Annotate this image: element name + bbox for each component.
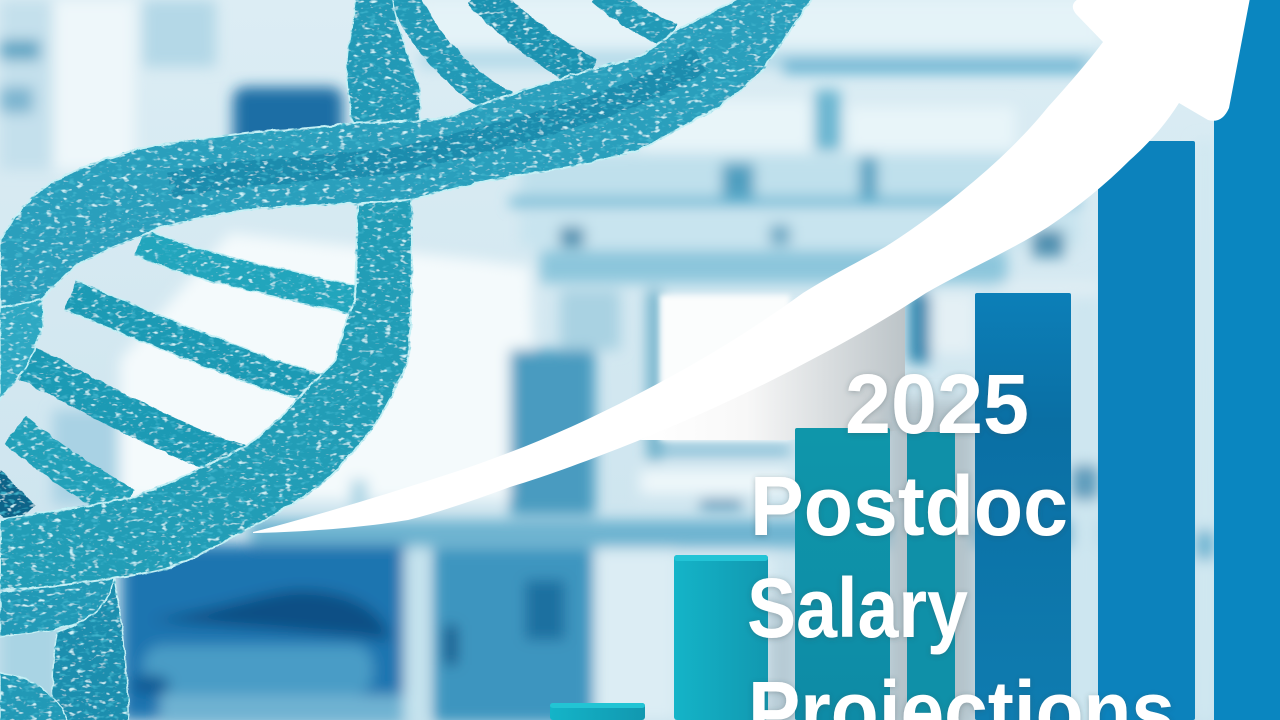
lower-left strands <box>0 575 129 720</box>
title line 1: 2025 <box>845 357 1029 451</box>
dark inner strand <box>0 470 35 525</box>
growth arrow <box>253 0 1250 533</box>
bar chart: rising salaries <box>550 0 1280 720</box>
bar 3 <box>795 428 890 720</box>
bar 4 <box>975 293 1071 720</box>
title line 3: Salary <box>747 561 968 655</box>
bar 6 <box>1214 0 1280 720</box>
title <box>747 357 1175 720</box>
bar 3 narrow rear column <box>907 432 955 720</box>
bar 2 <box>674 555 768 720</box>
front strand shading <box>170 60 700 185</box>
main front strand <box>0 0 815 307</box>
left lobe of strand <box>0 295 43 400</box>
main back strand <box>0 190 412 590</box>
title line 2: Postdoc <box>750 459 1068 553</box>
bar 5 <box>1098 141 1195 720</box>
bar 1 <box>550 703 645 720</box>
upper back strand <box>347 0 420 130</box>
DNA rungs <box>15 0 672 505</box>
DNA double helix <box>0 0 815 720</box>
white panel and shadow below arrow <box>640 295 977 720</box>
